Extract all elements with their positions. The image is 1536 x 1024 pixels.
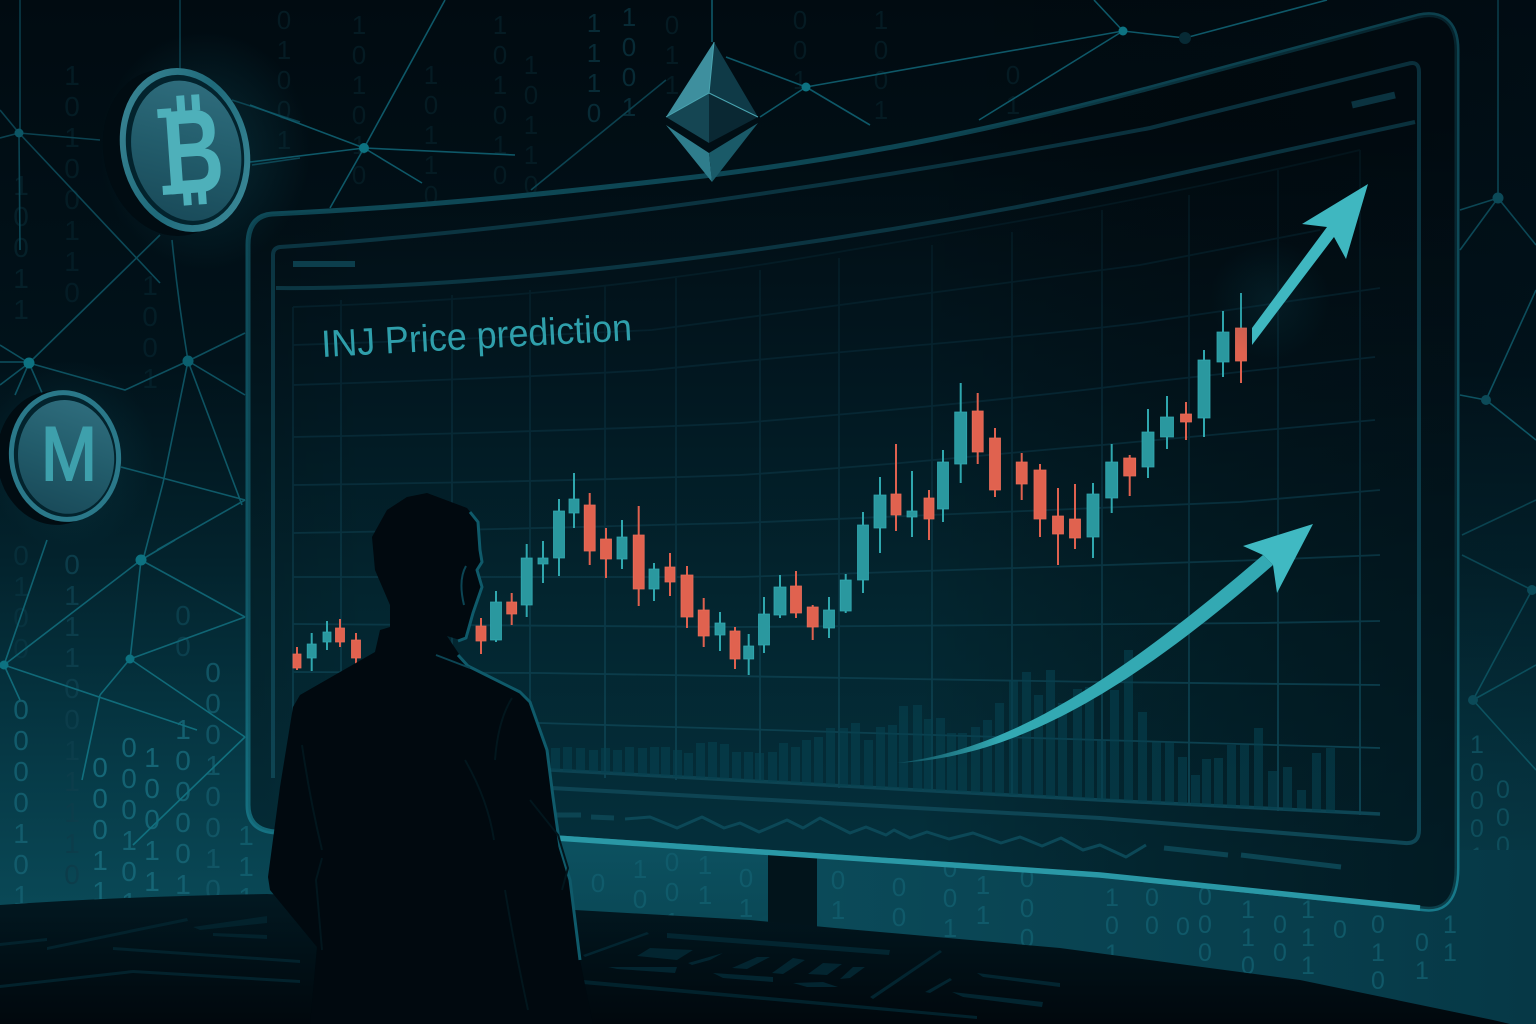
- monitor stand pillar: [768, 850, 817, 930]
- background binary digits: top: 101010: [485, 10, 515, 190]
- chart grid: [293, 150, 1380, 815]
- volume bars: [551, 650, 1335, 812]
- network mesh lines: top center: [250, 0, 1327, 208]
- background binary digits: top: 101010: [344, 10, 374, 190]
- bitcoin coin: [86, 30, 310, 270]
- binary digits on under-monitor panels: 01: [731, 863, 761, 923]
- background binary digits: left: 10100110: [56, 60, 88, 308]
- background binary digits: right: [1463, 731, 1517, 1011]
- binary digits on under-monitor panels: 111: [1294, 896, 1322, 980]
- monitor inner bezel and header: [273, 63, 1419, 843]
- ethereum icon: [666, 42, 758, 182]
- background binary digits: left: 100001: [168, 714, 198, 900]
- background binary digits: top: 10110: [516, 50, 546, 200]
- title: INJ Price prediction: [320, 307, 633, 366]
- background binary digits: top: 011: [657, 10, 687, 100]
- binary digits on under-monitor panels: 0: [1326, 916, 1354, 944]
- background binary digits: top: 10110: [416, 60, 446, 210]
- binary digits on under-monitor panels: 11: [690, 850, 720, 910]
- background binary digits: left: 0000101: [6, 694, 36, 911]
- header dash right: [1352, 95, 1395, 105]
- binary digits on under-monitor panels: 01: [823, 865, 853, 925]
- background binary digits: left: 0100: [6, 540, 36, 664]
- arrow: lower curved trend arrow: [897, 524, 1313, 763]
- background binary digits: top: 1001: [866, 5, 896, 125]
- binary digits on under-monitor panels: 00: [1138, 884, 1166, 940]
- binary digits on under-monitor panels: 00: [1266, 911, 1294, 967]
- binary digits on under-monitor panels: 0: [1169, 913, 1197, 941]
- binary digits on under-monitor panels: 01: [1408, 929, 1436, 985]
- background binary digits: left: 000101: [114, 732, 144, 918]
- background binary digits: top: 01001: [269, 5, 299, 155]
- binary digits on under-monitor panels: 001: [657, 847, 687, 937]
- background binary digits: left: 00010010: [198, 657, 228, 905]
- binary digits on under-monitor panels: 10: [625, 854, 655, 914]
- background binary digits: left: 1001: [134, 270, 166, 394]
- monero-style M coin: [0, 361, 155, 551]
- background binary digits: top: 001: [785, 5, 815, 95]
- binary digits on under-monitor panels: 110: [1234, 896, 1262, 980]
- background binary digits: left: 10011: [6, 170, 36, 325]
- background binary digits: left: 100111: [136, 742, 168, 928]
- background binary digits: left: 00011: [84, 752, 116, 907]
- person rim light: [458, 512, 580, 960]
- background binary digits: right: 1000100010: [1463, 731, 1491, 1011]
- monitor outer frame: [248, 15, 1457, 909]
- binary digits on under-monitor panels: 0: [583, 868, 613, 898]
- desk console: [0, 894, 1510, 1024]
- background binary digits: right: 00001101: [1489, 776, 1517, 1000]
- binary digits on under-monitor panels: 11: [968, 870, 998, 930]
- bitcoin symbol: [156, 83, 228, 221]
- binary digits on under-monitor panels: [583, 847, 1464, 995]
- panel under monitor: left: [540, 830, 768, 920]
- letter M: M: [41, 412, 97, 497]
- binary digits on under-monitor panels: 010: [1364, 911, 1392, 995]
- binary digits on under-monitor panels: 11: [1436, 911, 1464, 967]
- binary digits on under-monitor panels: 00: [884, 872, 914, 932]
- candlestick chart: [293, 293, 1246, 675]
- bottom status strip: dashes: [556, 815, 1341, 867]
- bitcoin symbol: B: [159, 83, 228, 221]
- background binary digits: top: [269, 2, 1028, 210]
- binary digits on under-monitor panels: 101: [1098, 884, 1126, 968]
- arrow: upper price arrow: [1210, 184, 1368, 360]
- network nodes: [0, 26, 1536, 705]
- background binary digits: top: 1001: [614, 2, 644, 122]
- binary digits on under-monitor panels: 000: [1012, 863, 1042, 953]
- desk detail marks: [0, 916, 1060, 1019]
- binary digits on under-monitor panels: 000: [1191, 883, 1219, 967]
- background binary digits: top: 1110: [579, 8, 609, 128]
- panel under monitor: right: [817, 850, 1536, 1024]
- binary digits on under-monitor panels: 001: [935, 853, 965, 943]
- background binary digits: left: 01110011110: [56, 549, 88, 890]
- header dash left: [293, 261, 355, 267]
- background binary digits: left: [6, 60, 262, 928]
- bottom status strip: sparkline: [625, 817, 1146, 857]
- person silhouette: [268, 493, 593, 1024]
- background binary digits: top: 01: [998, 60, 1028, 120]
- background binary digits: left: 111: [230, 820, 262, 913]
- background binary digits: left: 00: [168, 600, 198, 662]
